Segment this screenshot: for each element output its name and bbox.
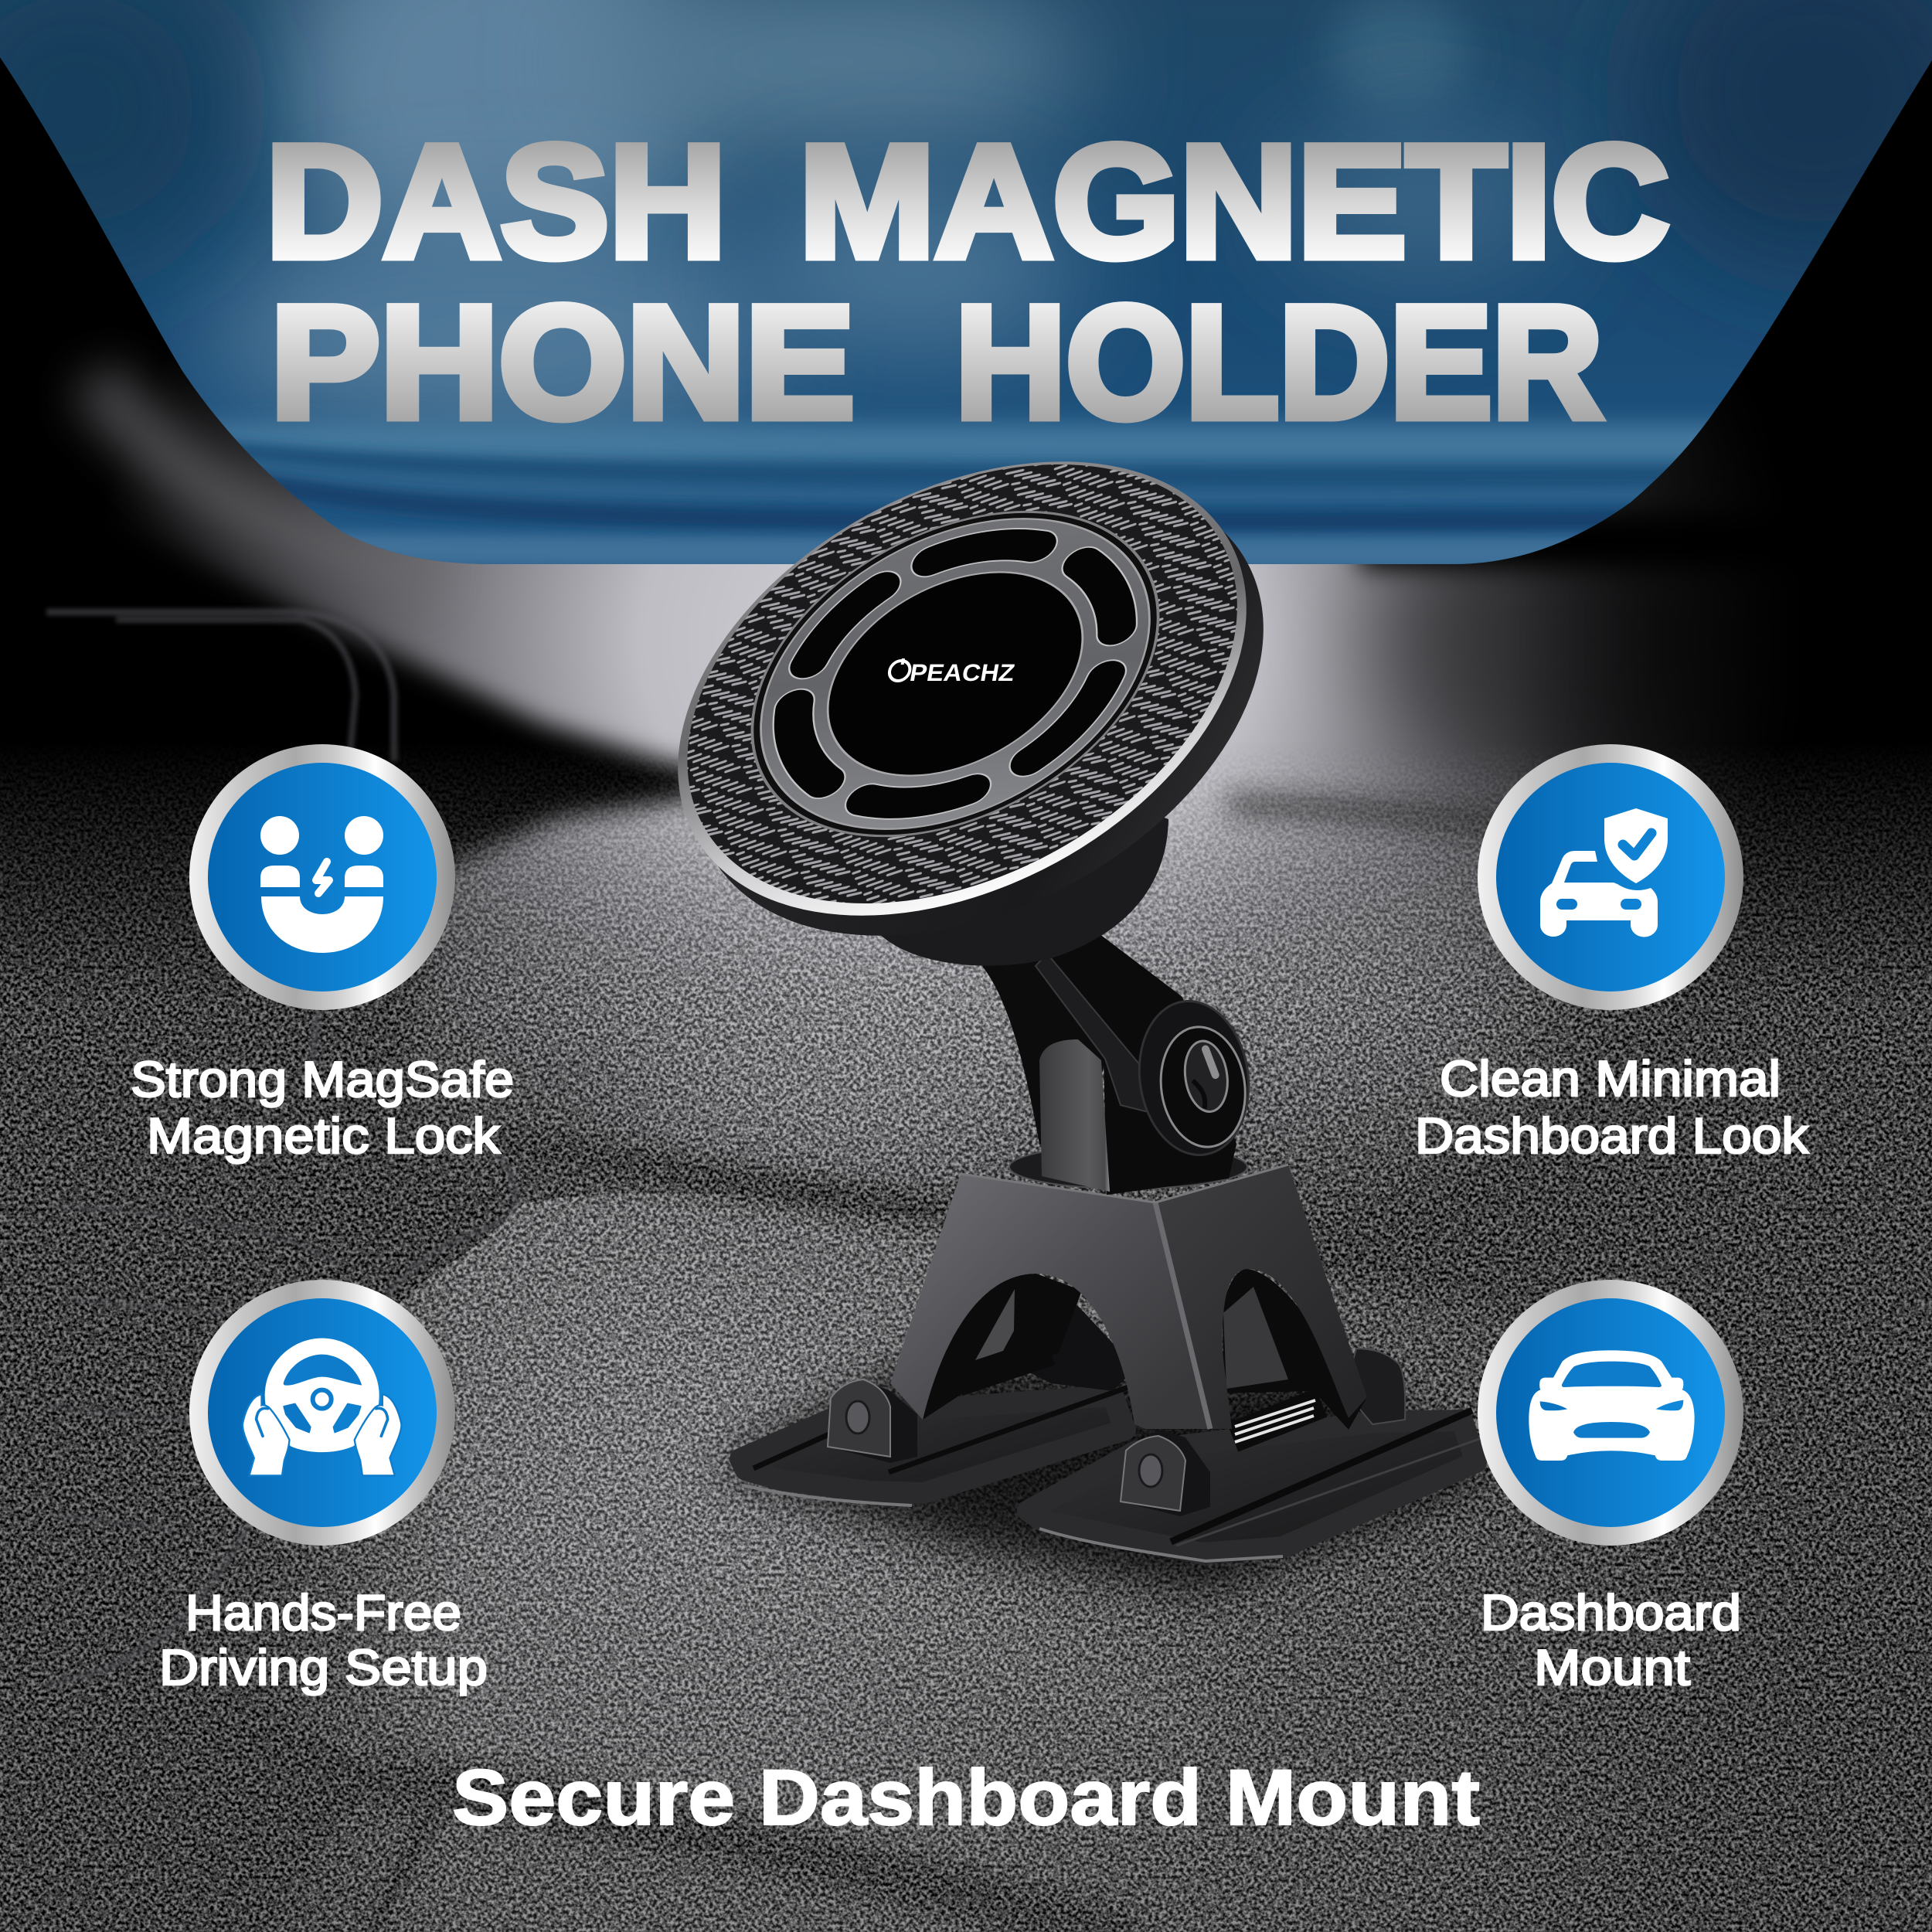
foot shadows — [711, 1360, 1499, 1592]
caption — [1415, 1050, 1809, 1164]
arch interiors — [923, 1274, 1082, 1420]
feature: dashboard mount — [1478, 1280, 1743, 1696]
disc back body — [617, 389, 1342, 1029]
icon badge: hands on steering wheel — [189, 1280, 455, 1546]
title line 2: HOLDER — [955, 273, 1603, 451]
center hub — [696, 446, 1214, 902]
product: magnetic phone mount — [600, 369, 1499, 1592]
six slots — [749, 492, 1162, 855]
brand logo: PEACHZ — [908, 659, 1017, 686]
title line 1 — [266, 112, 1669, 291]
rear foot plate — [740, 1396, 1125, 1493]
stand right face — [1155, 1165, 1367, 1429]
title — [266, 112, 1669, 451]
collar ring — [1009, 1145, 1247, 1189]
caption — [159, 1584, 488, 1696]
rear neck cup — [873, 773, 1168, 966]
back right hinge — [1345, 1349, 1405, 1424]
icon badge: sports car front — [1478, 1280, 1743, 1546]
rear curved arm — [982, 935, 1113, 1159]
metal spoke ring — [707, 455, 1203, 893]
caption: Mount — [1534, 1639, 1690, 1696]
feature: hands-free driving — [159, 1280, 488, 1696]
icon badge: car with shield — [1478, 744, 1743, 1010]
caption: Dashboard — [1481, 1584, 1741, 1641]
title line 2: PHONE — [270, 273, 855, 451]
caption: Dashboard Look — [1415, 1107, 1809, 1164]
caption: Hands-Free — [185, 1584, 461, 1641]
silver rim — [600, 369, 1325, 1009]
caption: Strong MagSafe — [131, 1051, 514, 1107]
caption — [1481, 1584, 1741, 1696]
feature: strong magnetic lock — [131, 744, 514, 1164]
feature: clean minimal look — [1415, 744, 1809, 1164]
title line 1: MAGNETIC — [799, 112, 1669, 291]
footer tagline: Secure Dashboard Mount — [452, 1753, 1480, 1842]
black center cap — [793, 531, 1117, 817]
front foot plate — [1028, 1420, 1476, 1553]
caption: Driving Setup — [159, 1639, 488, 1696]
caption — [131, 1051, 514, 1164]
knob — [1130, 994, 1258, 1162]
icon badge: magnet — [189, 744, 455, 1010]
title line 1: DASH — [266, 112, 726, 291]
blue title banner — [0, 0, 1932, 587]
rear inner leg and chrome rods — [1005, 1283, 1136, 1391]
disc face — [600, 369, 1325, 1009]
title line 2 — [270, 273, 1603, 451]
left hinge — [828, 1379, 917, 1463]
stand left face — [890, 1174, 1210, 1429]
caption: Clean Minimal — [1440, 1050, 1781, 1107]
caption: Magnetic Lock — [147, 1107, 501, 1164]
front hinge — [1121, 1430, 1210, 1516]
carbon fiber ring — [611, 375, 1313, 993]
vertical post — [1039, 1039, 1110, 1192]
upper arm band — [1047, 931, 1236, 1195]
